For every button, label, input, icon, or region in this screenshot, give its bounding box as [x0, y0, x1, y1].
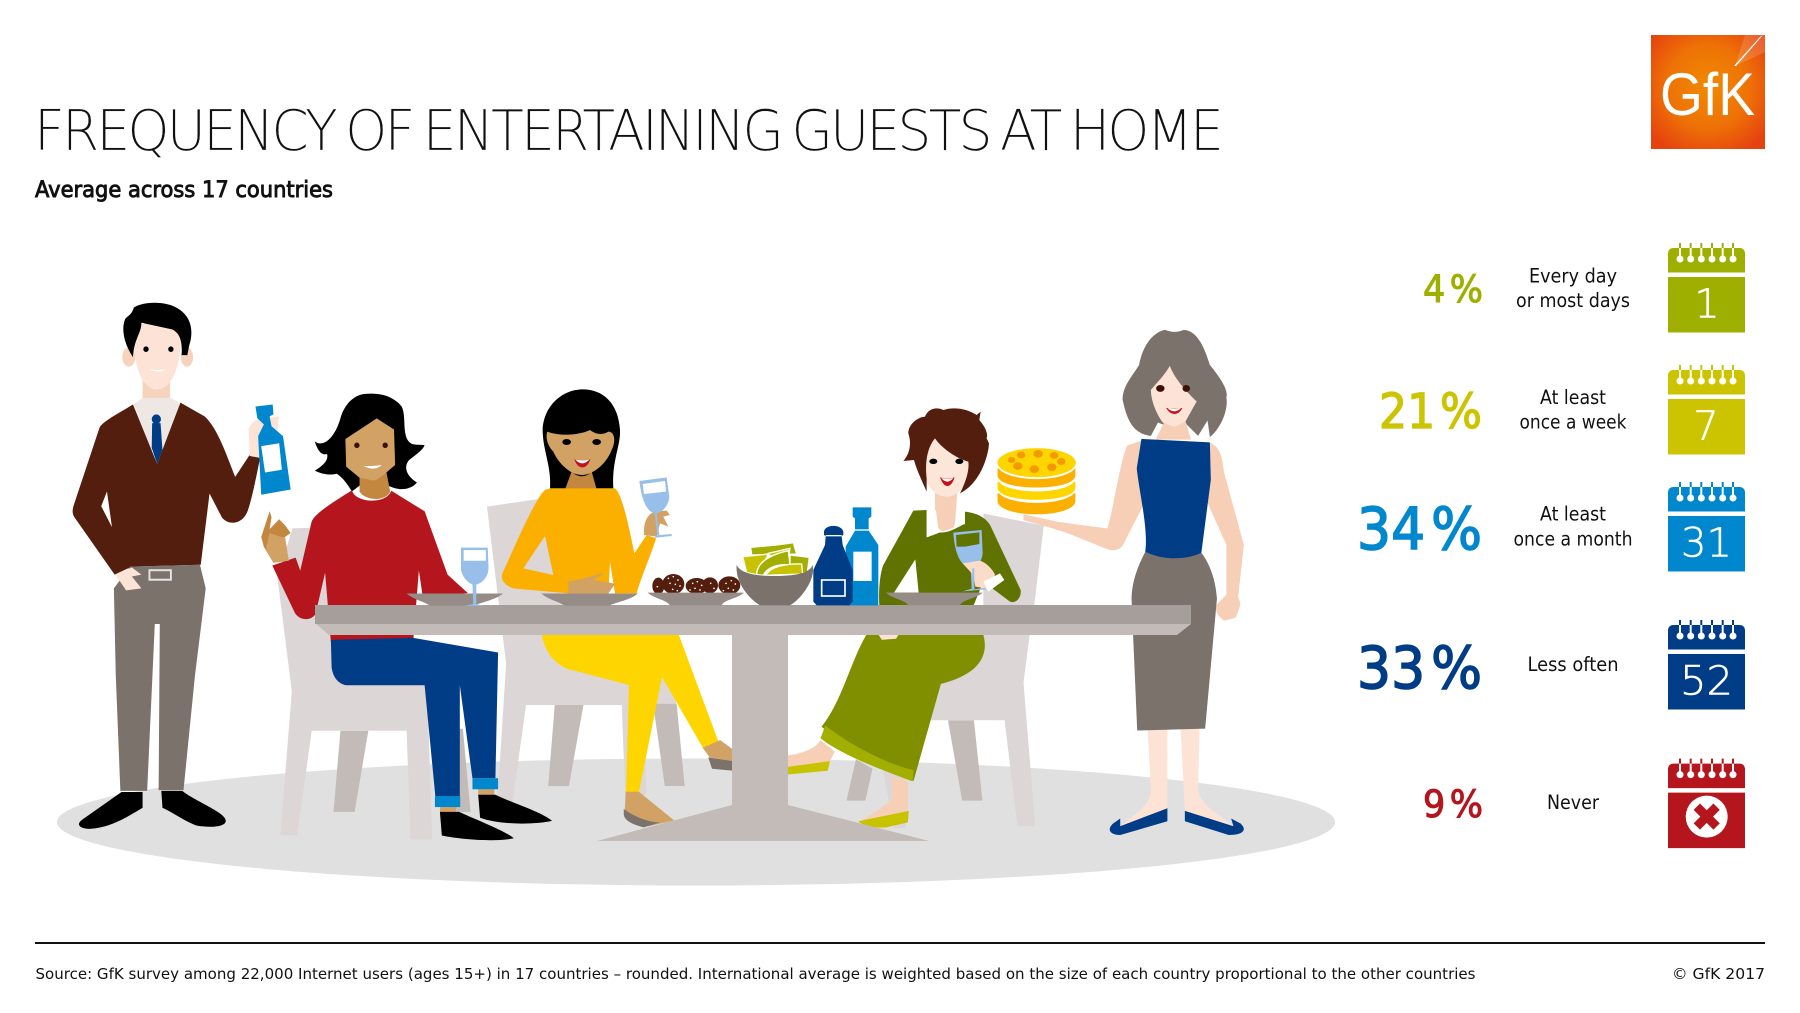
bowl of chips	[737, 543, 813, 605]
plate	[886, 593, 983, 605]
copyright: © GfK 2017	[1672, 965, 1765, 983]
row: 21% at least once a week	[1379, 365, 1745, 454]
footer rule	[35, 942, 1765, 944]
calendar icon	[1668, 243, 1745, 332]
label: At least	[1540, 503, 1606, 526]
row: 33% less often	[1357, 620, 1745, 710]
calendar icon: 7	[1693, 404, 1719, 450]
label	[1514, 503, 1632, 551]
calendar icon	[1668, 482, 1745, 572]
logo: GfK: GfK	[1660, 61, 1755, 128]
value: 33 %	[1357, 634, 1482, 702]
value: 21 %	[1379, 384, 1482, 440]
person: host woman with cake	[1023, 330, 1244, 835]
value: 34 %	[1357, 495, 1482, 563]
calendar icon: 1	[1694, 282, 1720, 328]
calendar icon	[1668, 620, 1745, 710]
calendar icon: 31	[1681, 520, 1732, 566]
label: Never	[1547, 791, 1600, 814]
label: once a month	[1514, 528, 1632, 551]
label: At least	[1540, 386, 1606, 409]
row: 4% every day	[1423, 243, 1745, 332]
calendar icon	[1668, 759, 1745, 848]
label: Every day	[1529, 264, 1617, 288]
bottle: navy	[813, 526, 853, 605]
plates and wine glass	[407, 548, 638, 606]
row: 34% at least once a month	[1357, 482, 1745, 572]
row: 9% never	[1423, 759, 1745, 848]
title: FREQUENCY OF ENTERTAINING GUESTS AT HOME	[34, 99, 1221, 164]
label: once a week	[1520, 410, 1627, 434]
person: seated woman in yellow	[502, 389, 733, 827]
value: 9 %	[1423, 783, 1483, 826]
cake	[997, 448, 1076, 514]
illustration: dinner party	[57, 303, 1335, 886]
calendar icon	[1668, 365, 1745, 454]
bottle: blue	[846, 507, 878, 605]
label: or most days	[1516, 289, 1630, 312]
table	[315, 605, 1191, 841]
chairs	[277, 499, 1044, 839]
label	[1520, 386, 1627, 434]
person: seated woman in green	[788, 408, 1021, 828]
cookies	[648, 574, 744, 605]
person: standing man with bottle	[73, 303, 291, 829]
calendar icon: 52	[1680, 658, 1733, 704]
label	[1516, 264, 1630, 312]
value: 4 %	[1423, 268, 1483, 311]
food and bottles	[648, 507, 983, 605]
logo: GfK	[1651, 35, 1765, 149]
person: seated woman in red sweater	[261, 394, 552, 840]
subtitle: Average across 17 countries	[35, 178, 333, 203]
source note: Source: GfK survey among 22,000 Internet users (ages 15+) in 17 countries – rounded. International average is weighted based on the size of each country proportional to the other countries	[36, 965, 1476, 983]
floor ellipse	[57, 758, 1335, 886]
label: Less often	[1528, 653, 1618, 676]
